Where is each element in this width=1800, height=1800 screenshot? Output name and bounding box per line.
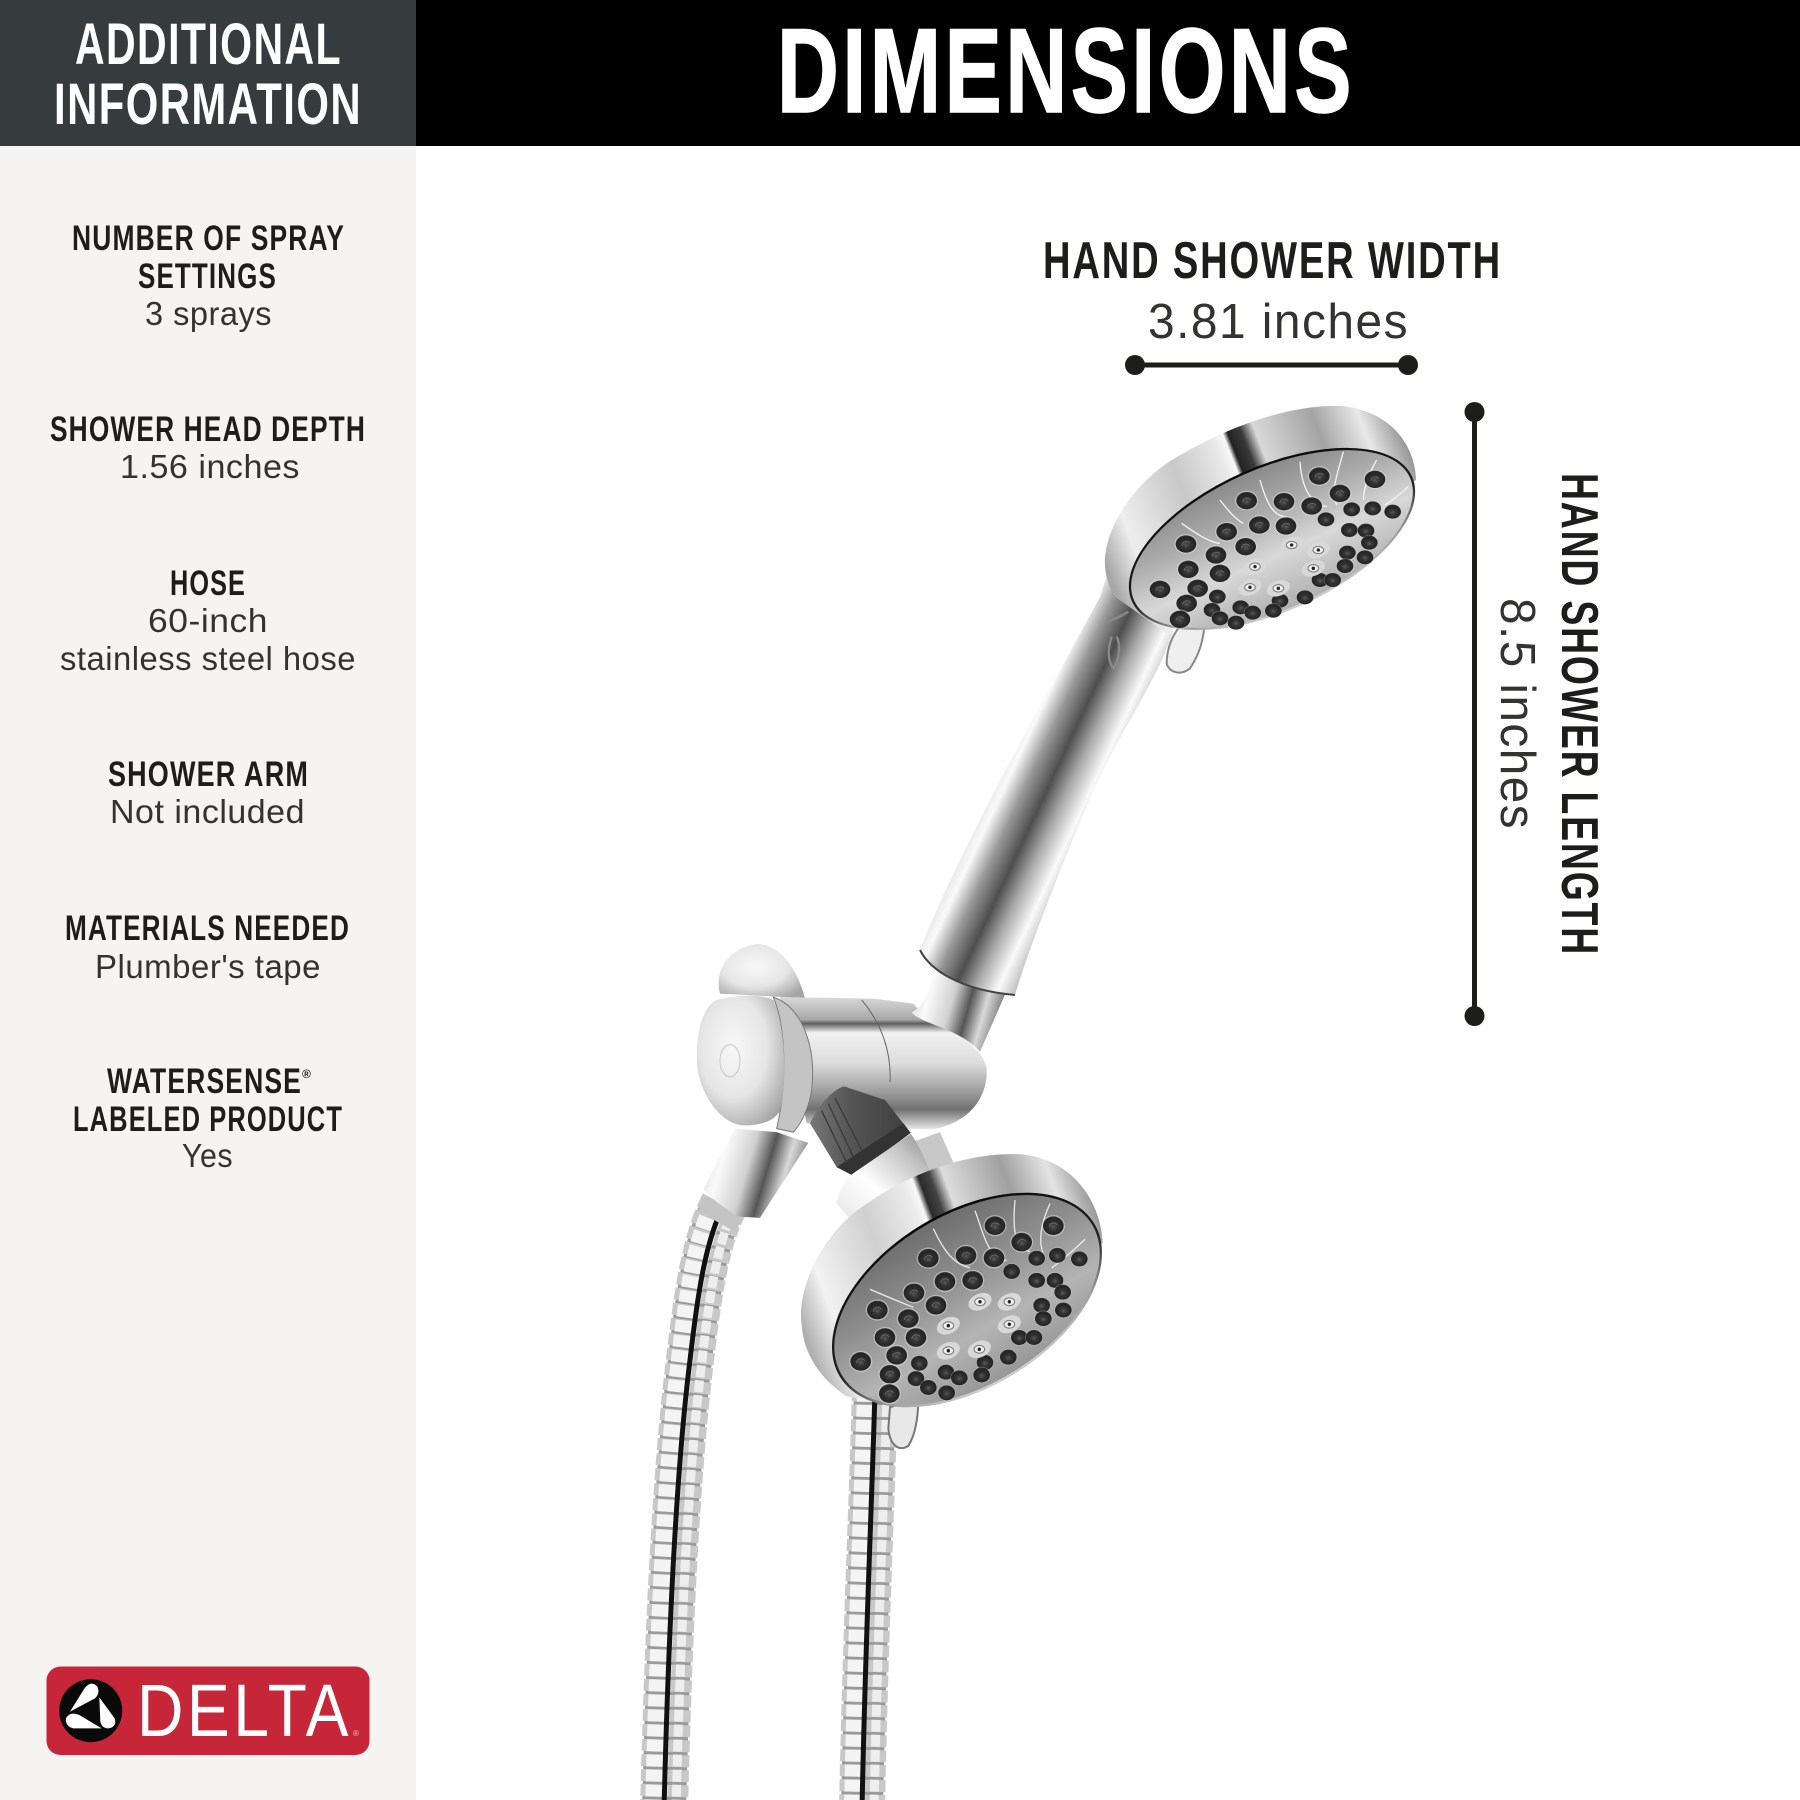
logo detail on handle	[1107, 612, 1128, 668]
title banner: dimensions: DIMENSIONS	[777, 4, 1355, 138]
spec: number of spray settings: SETTINGS	[138, 257, 277, 296]
right hose	[854, 1390, 887, 1800]
spec: shower head depth: SHOWER HEAD DEPTH	[50, 410, 366, 449]
lower head face	[799, 1148, 1135, 1452]
spec: materials needed	[65, 909, 350, 985]
spec: shower arm: SHOWER ARM	[108, 755, 309, 794]
logo: delta	[46, 1666, 370, 1755]
upper hand shower head	[1102, 406, 1442, 673]
knurled nut	[810, 1086, 911, 1176]
spec: watersense labeled product	[73, 1062, 343, 1174]
swivel neck	[912, 970, 1005, 1052]
lower head back	[801, 1154, 1103, 1407]
spec: watersense labeled product: ®	[302, 1067, 311, 1081]
hand shower handle	[920, 575, 1175, 995]
sidebar header: additional information: ADDITIONAL	[75, 12, 342, 77]
spec: number of spray settings	[72, 219, 345, 332]
handle base edge	[920, 950, 1015, 995]
product: shower hoses, mount and two heads	[656, 406, 1442, 1800]
sidebar header: additional information	[0, 0, 416, 146]
spec: watersense labeled product: WATERSENSE	[107, 1062, 302, 1101]
width dimension arrow	[1125, 355, 1418, 375]
barrel ring	[773, 997, 813, 1132]
lower arm to head	[910, 1132, 955, 1182]
length dimension label: HAND SHOWER LENGTH	[1550, 473, 1608, 956]
spec: shower head depth: 1.56 inches	[120, 448, 300, 485]
spec: materials needed: MATERIALS NEEDED	[65, 909, 350, 948]
logo: delta: ®	[353, 1729, 359, 1738]
lower shower head	[799, 1148, 1135, 1452]
left hose	[656, 1205, 736, 1800]
upper lever	[1167, 622, 1205, 673]
spec: hose	[60, 564, 356, 677]
title banner: dimensions	[416, 0, 1800, 146]
spec: hose: stainless steel hose	[60, 640, 356, 677]
hose ferrule	[698, 1196, 742, 1232]
spec: watersense labeled product: LABELED PRODUCT	[73, 1100, 343, 1139]
spec: hose: 60-inch	[148, 602, 268, 639]
spec: hose: HOSE	[170, 564, 246, 603]
end cap	[697, 996, 784, 1125]
spec: number of spray settings: 3 sprays	[145, 295, 272, 332]
spec: shower arm: Not included	[110, 793, 305, 830]
upper head back	[1105, 406, 1416, 633]
lower lever	[888, 1398, 918, 1448]
width dimension label	[1043, 232, 1502, 349]
hose connector	[703, 1129, 808, 1218]
upper head face	[1102, 410, 1442, 668]
spec: watersense labeled product: Yes	[182, 1137, 233, 1174]
length dimension label: 8.5 inches	[1490, 598, 1544, 830]
chrome collar	[837, 1134, 931, 1223]
spec: number of spray settings: NUMBER OF SPRAY	[72, 219, 345, 258]
length dimension arrow	[1464, 402, 1484, 1026]
upper head nozzles	[1148, 466, 1402, 630]
spec: materials needed: Plumber's tape	[95, 948, 321, 985]
width dimension label: 3.81 inches	[1148, 295, 1409, 349]
width dimension label: HAND SHOWER WIDTH	[1043, 232, 1502, 290]
length dimension label	[1490, 473, 1608, 956]
top knob	[719, 944, 805, 998]
sidebar panel background	[0, 146, 416, 1800]
sidebar header: additional information: INFORMATION	[54, 72, 362, 137]
lower head nozzles	[849, 1215, 1088, 1404]
mount assembly	[697, 944, 1005, 1232]
barrel body	[780, 997, 987, 1129]
spec: shower arm	[108, 755, 309, 830]
spec: shower head depth	[50, 410, 366, 485]
logo: delta: DELTA	[137, 1669, 352, 1752]
